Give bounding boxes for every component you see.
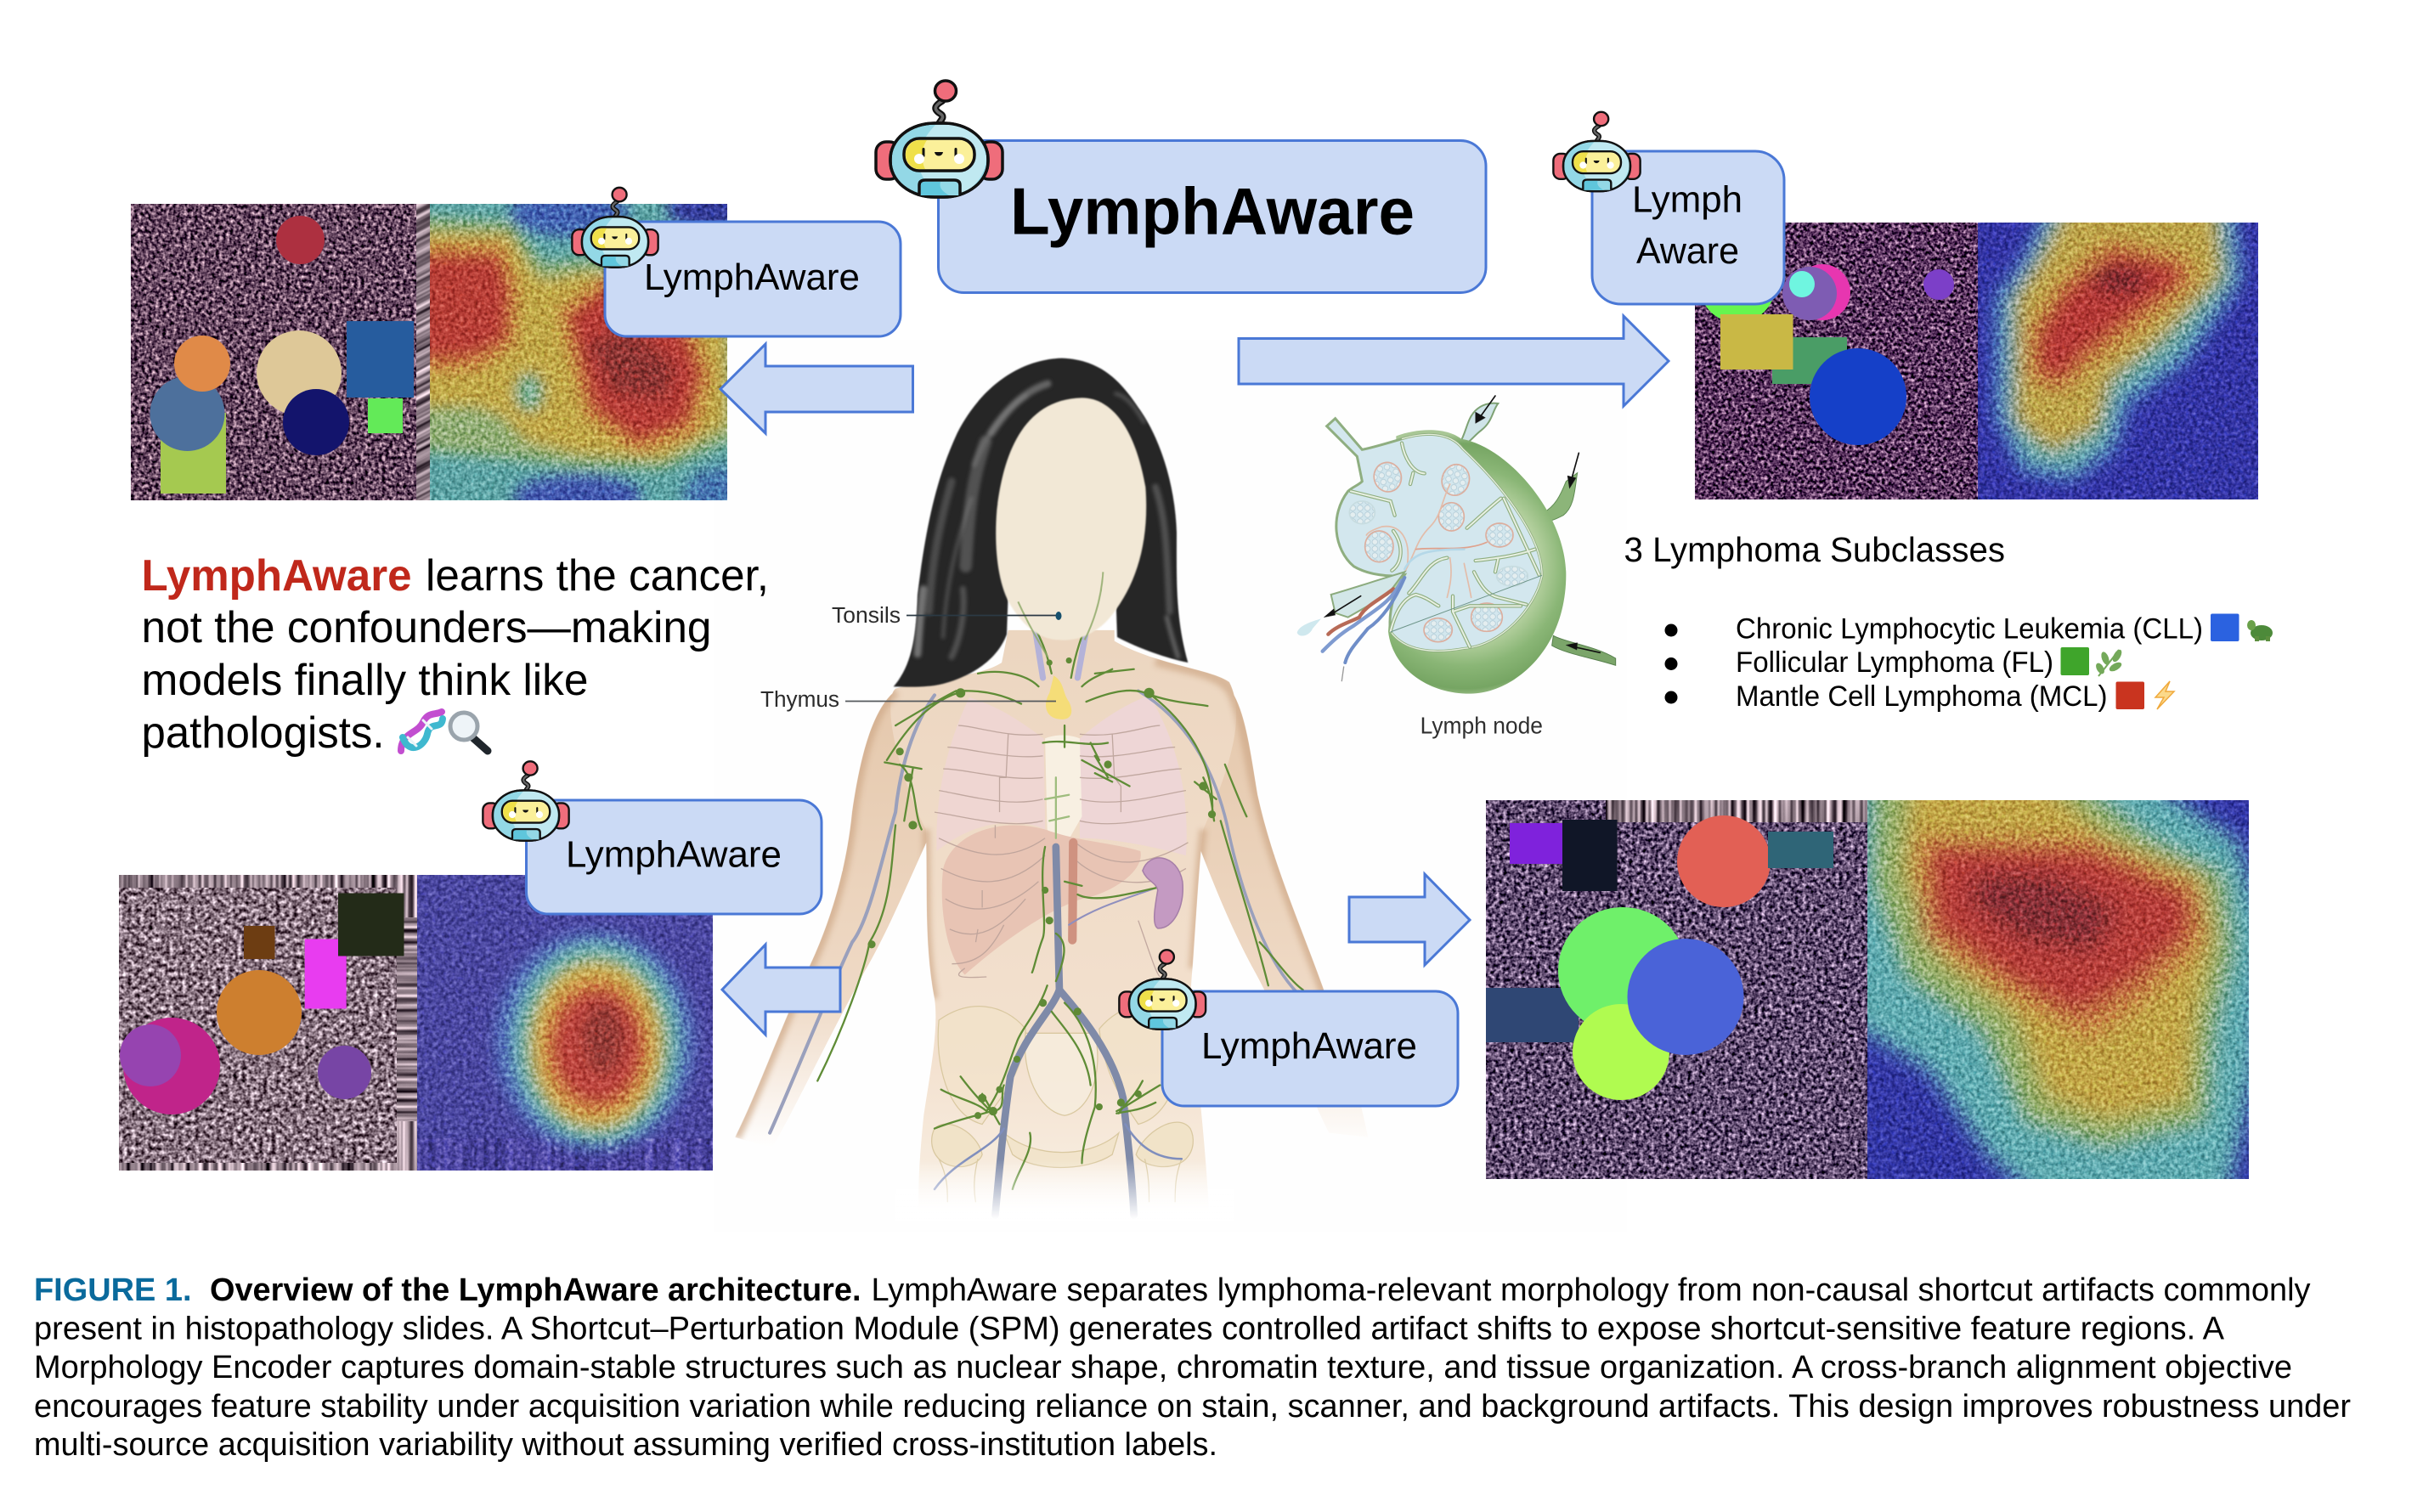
figure caption [34, 1272, 2351, 1463]
icon: bottom-right robot [1119, 950, 1206, 1030]
figure caption: FIGURE 1. [34, 1272, 192, 1308]
vessel tree [1366, 484, 1487, 597]
illustration: human lymphatic system [735, 358, 1368, 1221]
image pair: top-right tissue and heatmap [1695, 223, 2258, 499]
image pair: bottom-left tissue and heatmap [119, 875, 713, 1171]
node interior [1327, 419, 1542, 651]
label box: bottom-left LymphAware: LymphAware [566, 834, 782, 875]
image pair: top-left tissue and heatmap [131, 204, 727, 500]
list item: MCL: Mantle Cell Lymphoma (MCL) [1736, 680, 2107, 713]
node capsule [1388, 430, 1566, 694]
body edge shading [735, 661, 1327, 1137]
arrow: to top-right image [1239, 316, 1669, 406]
label box: bottom-right LymphAware [1162, 991, 1458, 1106]
spleen [1143, 858, 1183, 928]
label: Tonsils: Tonsils [832, 604, 901, 628]
illustration: lymph node [1297, 396, 1616, 738]
hilum [1331, 572, 1404, 618]
leg fade [895, 1159, 1234, 1221]
tissue image with artifact shapes [119, 875, 417, 1171]
right arm [1182, 682, 1368, 1137]
icon: bottom-left robot [483, 761, 569, 841]
image pair: bottom-right tissue and heatmap [1486, 800, 2249, 1179]
lymph vessels [817, 583, 1303, 1189]
hair [894, 358, 1188, 687]
tagline text block: not the confounders—making [141, 603, 712, 652]
tagline text block: models finally think like [141, 656, 588, 705]
attention heatmap [1978, 223, 2258, 499]
list item: FL: Follicular Lymphoma (FL) [1736, 646, 2053, 679]
figure caption: Overview of the LymphAware architecture. [210, 1272, 861, 1308]
tagline text block: pathologists. [141, 708, 384, 758]
tagline text block: LymphAware [141, 551, 411, 601]
face [996, 398, 1146, 640]
thymus [1046, 675, 1071, 719]
blood vessels [770, 583, 1299, 1216]
label box: top-right Lymph Aware: Lymph [1632, 178, 1742, 221]
label box: bottom-right LymphAware: LymphAware [1201, 1025, 1417, 1067]
icon: top-right robot [1553, 112, 1641, 191]
torso [890, 630, 1236, 1220]
main LymphAware title box: LymphAware [1010, 174, 1415, 249]
arrow: to bottom-left image [722, 945, 840, 1035]
icon: main robot [876, 81, 1003, 197]
sternum [1045, 736, 1082, 847]
figure caption: LymphAware separates lymphoma-relevant morphology from non-causal shortcut artifacts commonly [872, 1272, 2311, 1308]
attention heatmap [417, 875, 713, 1171]
septa [1351, 443, 1539, 647]
icon: top-left robot [572, 188, 658, 268]
label: Thymus: Thymus [760, 688, 839, 712]
label box: top-right Lymph Aware [1592, 151, 1784, 304]
droplet [1297, 618, 1321, 636]
tagline text block: learns the cancer, [426, 551, 769, 601]
ribs [935, 725, 1188, 978]
list item: CLL: Chronic Lymphocytic Leukemia (CLL) [1736, 613, 2203, 646]
efferent vessels [1323, 578, 1404, 681]
attention heatmap [1867, 800, 2249, 1179]
attention heatmap [430, 204, 727, 500]
lungs [936, 697, 1045, 851]
flow arrows [1324, 396, 1600, 652]
subclass list [1665, 613, 2273, 713]
main LymphAware title box [938, 141, 1486, 292]
follicles [1349, 460, 1528, 642]
arrow: to top-left image [720, 344, 912, 433]
subclass heading: 3 Lymphoma Subclasses [1624, 530, 2005, 569]
section line [1391, 575, 1542, 632]
tissue image with artifact shapes [131, 204, 430, 500]
tissue image with artifact shapes [1695, 223, 1978, 499]
label: Lymph node: Lymph node [1420, 712, 1543, 738]
left arm [735, 691, 930, 1148]
liver [942, 825, 1141, 974]
pelvis bones [932, 1007, 1193, 1202]
human body with organs and lymph vessels [735, 583, 1368, 1221]
tissue image with artifact shapes [1486, 800, 1867, 1179]
label box: top-left LymphAware [605, 222, 901, 336]
label box: bottom-left LymphAware [527, 800, 822, 914]
icon: magnifying glass [450, 713, 488, 751]
arrow: to bottom-right image [1349, 874, 1470, 965]
label: Tonsils [832, 604, 1062, 628]
figure caption: encourages feature stability under acquisition variation while reducing reliance on stain, scanner, and background artifacts. This design improves robustness under [34, 1389, 2351, 1425]
label box: top-right Lymph Aware: Aware [1636, 230, 1739, 272]
figure caption: multi-source acquisition variability without assuming verified cross-institution labels. [34, 1427, 1217, 1463]
afferent vessels [1460, 403, 1616, 665]
icon: DNA [401, 712, 443, 751]
label box: top-left LymphAware: LymphAware [644, 257, 860, 298]
lymph nodes clusters [867, 657, 1216, 1119]
figure caption: Morphology Encoder captures domain-stable structures such as nuclear shape, chromatin texture, and tissue organization. A cross-branch alignment objective [34, 1350, 2292, 1385]
figure caption: present in histopathology slides. A Shortcut–Perturbation Module (SPM) generates controlled artifact shifts to expose shortcut-sensitive feature regions. A [34, 1312, 2225, 1347]
tagline text block [141, 551, 769, 758]
